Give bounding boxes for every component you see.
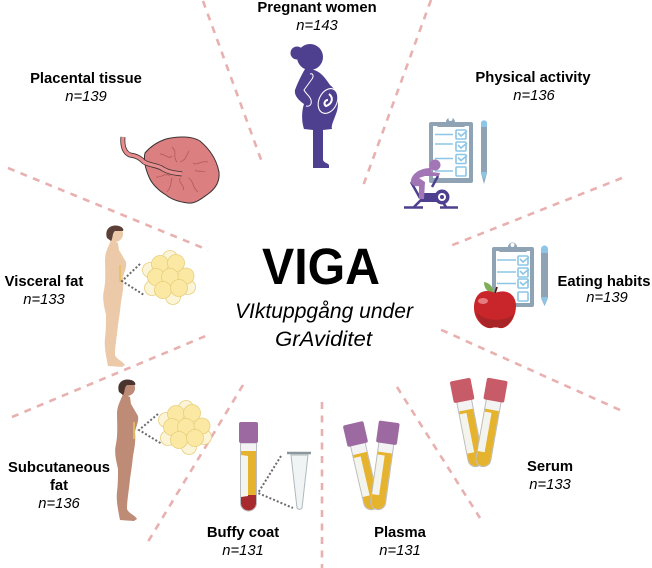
label: visceral fat: [5, 274, 83, 308]
label: eating habits: Eating habits: [558, 274, 650, 290]
label: eating habits: n=139: [586, 290, 628, 306]
label: plasma: n=131: [379, 543, 421, 559]
fat cells: [142, 250, 196, 304]
label: physical activity: [475, 70, 591, 104]
label: subcutaneous fat: Subcutaneous: [8, 460, 110, 476]
label: serum: n=133: [529, 477, 572, 493]
label: buffy coat: n=131: [222, 543, 264, 559]
icon: body with subcutaneous fat cells: [115, 380, 212, 521]
label: plasma: Plasma: [374, 525, 427, 541]
label: serum: Serum: [527, 459, 573, 475]
label: visceral fat: n=133: [23, 292, 66, 308]
subtitle: GrAviditet: [275, 327, 373, 351]
apple: [474, 282, 516, 328]
fat cells: [158, 400, 212, 454]
icon: clipboard and exercise bike: [404, 117, 487, 208]
label: subcutaneous fat: n=136: [38, 496, 81, 512]
microtube: [287, 453, 311, 509]
dotted callout: [258, 456, 293, 508]
exercise bike: [404, 160, 458, 208]
icon: serum tubes: [450, 378, 508, 469]
label: pregnant women: [257, 0, 377, 34]
label: subcutaneous fat: fat: [50, 478, 68, 494]
body: [103, 226, 126, 367]
icon: clipboard and apple: [474, 242, 548, 328]
subtitle: VIktuppgång under: [235, 299, 414, 323]
dotted callout: [139, 414, 162, 444]
clipboard: [492, 242, 534, 307]
label: physical activity: Physical activity: [475, 70, 591, 86]
dotted callout: [122, 264, 144, 295]
label: buffy coat: Buffy coat: [207, 525, 279, 541]
label: placental tissue: Placental tissue: [30, 71, 142, 87]
icon: body with visceral fat cells: [103, 226, 196, 367]
label: placental tissue: [30, 71, 142, 105]
label: pregnant women: n=143: [296, 18, 339, 34]
pencil: [541, 246, 548, 306]
icon: buffy coat tube and microtube: [239, 422, 311, 511]
icon: placenta: [123, 137, 219, 203]
icon: plasma tubes: [343, 420, 400, 512]
label: pregnant women: Pregnant women: [257, 0, 377, 16]
clipboard: [429, 117, 473, 183]
label: physical activity: n=136: [513, 88, 556, 104]
label: serum: [527, 459, 573, 493]
tube: [239, 422, 258, 511]
label: subcutaneous fat: [8, 460, 110, 512]
label: placental tissue: n=139: [65, 89, 107, 105]
title: VIGA: [262, 238, 380, 295]
pencil: [481, 120, 487, 184]
label: buffy coat: [207, 525, 279, 559]
body: [115, 380, 138, 521]
label: visceral fat: Visceral fat: [5, 274, 83, 290]
icon: pregnant woman: [290, 44, 342, 168]
label: eating habits: [558, 274, 650, 306]
subtitle: [235, 299, 414, 351]
label: plasma: [374, 525, 427, 559]
